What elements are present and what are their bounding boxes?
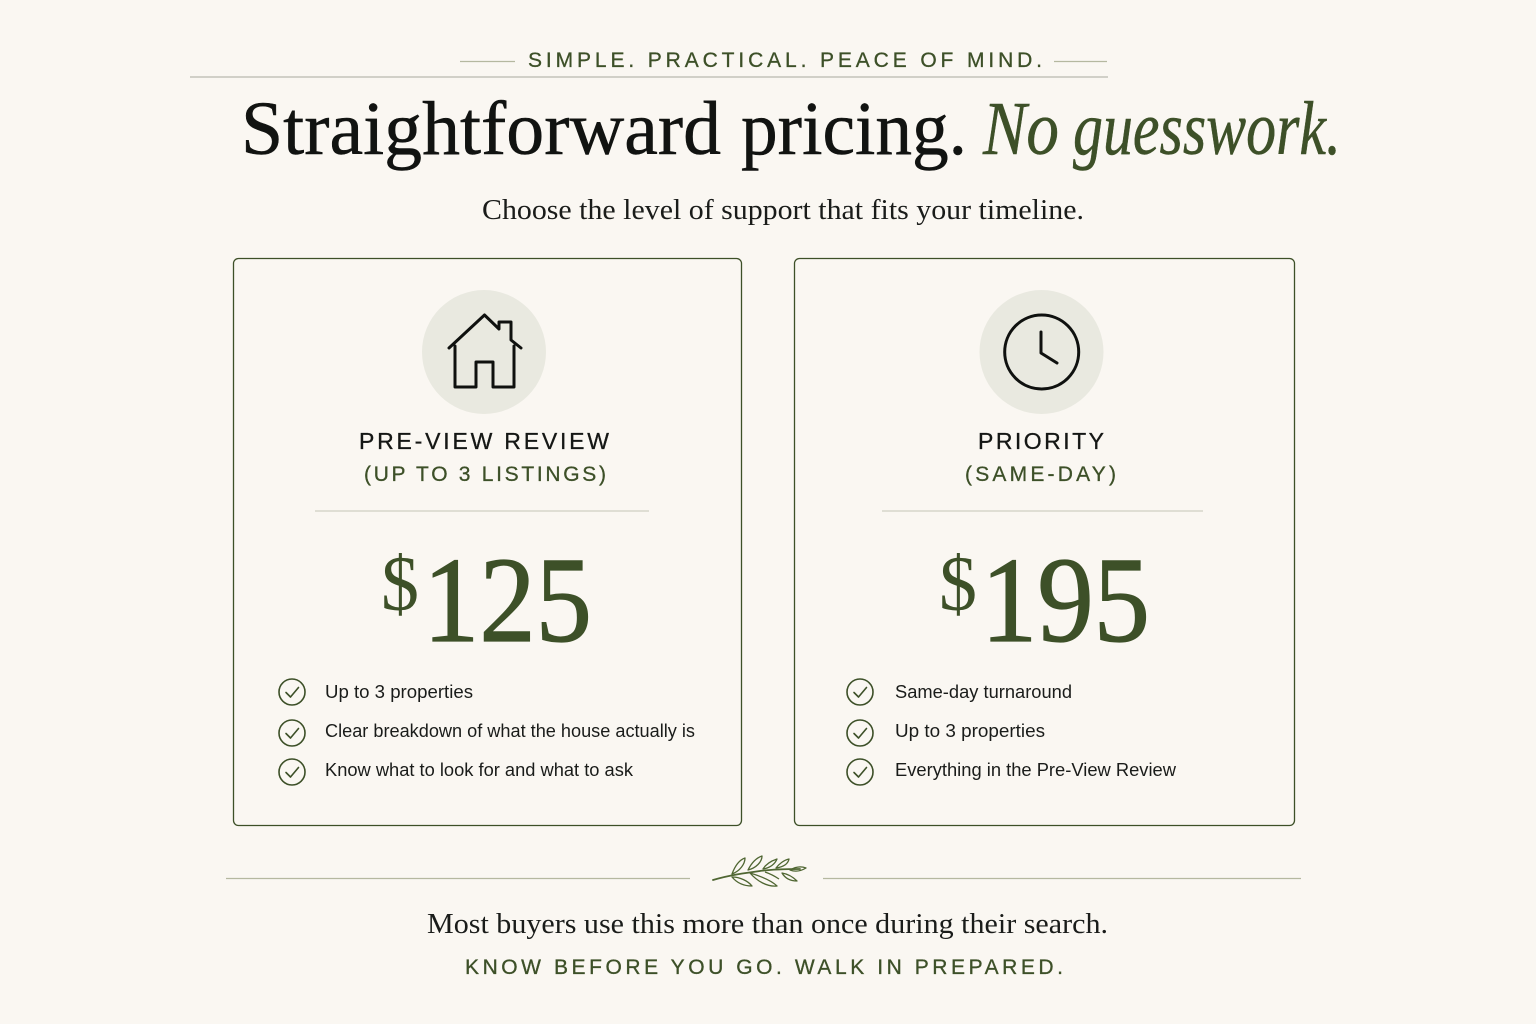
eyebrow tagline: SIMPLE. PRACTICAL. PEACE OF MIND. (528, 49, 1042, 72)
price: 195 (981, 533, 1150, 668)
feature list (279, 679, 695, 785)
panel: priority (794, 258, 1294, 826)
title: No (982, 87, 1059, 171)
feature list (847, 679, 1177, 785)
closing statement: Most buyers use this more than once during their search. (427, 908, 1108, 940)
feature: properties: Up to 3 properties (325, 682, 473, 702)
price: 125 (423, 533, 592, 668)
feature: what to ask: Know what to look for and what to ask (325, 760, 634, 780)
plan qualifier: (SAME-DAY) (965, 463, 1116, 486)
plan name: PRE-VIEW REVIEW (359, 428, 609, 454)
title: guesswork. (1073, 87, 1341, 171)
icon: house (422, 290, 546, 414)
closing tagline: KNOW BEFORE YOU GO. WALK IN PREPARED. (465, 956, 1063, 979)
title: pricing. (741, 87, 967, 171)
feature: what to ask (279, 759, 634, 785)
feature: breakdown: Clear breakdown of what the house actually is (325, 721, 695, 741)
feature: turnaround: Same-day turnaround (895, 682, 1072, 702)
title (241, 87, 1341, 171)
subtitle: Choose the level of support that fits your timeline. (482, 195, 1084, 226)
icon: clock (980, 290, 1104, 414)
feature: properties: Up to 3 properties (895, 721, 1045, 741)
feature: turnaround (847, 679, 1072, 705)
feature: properties (847, 720, 1045, 746)
feature: everything included: Everything in the Pre-View Review (895, 760, 1177, 780)
feature: everything included (847, 759, 1177, 785)
plan qualifier: (UP TO 3 LISTINGS) (364, 463, 606, 486)
feature: properties (279, 679, 473, 705)
panel: pre-view review (234, 258, 742, 826)
price: $ (939, 540, 977, 627)
feature: breakdown (279, 720, 695, 746)
price: $ (381, 540, 419, 627)
icon: leaf sprig (713, 856, 806, 886)
title: Straightforward (241, 87, 721, 171)
plan name: PRIORITY (978, 428, 1104, 454)
